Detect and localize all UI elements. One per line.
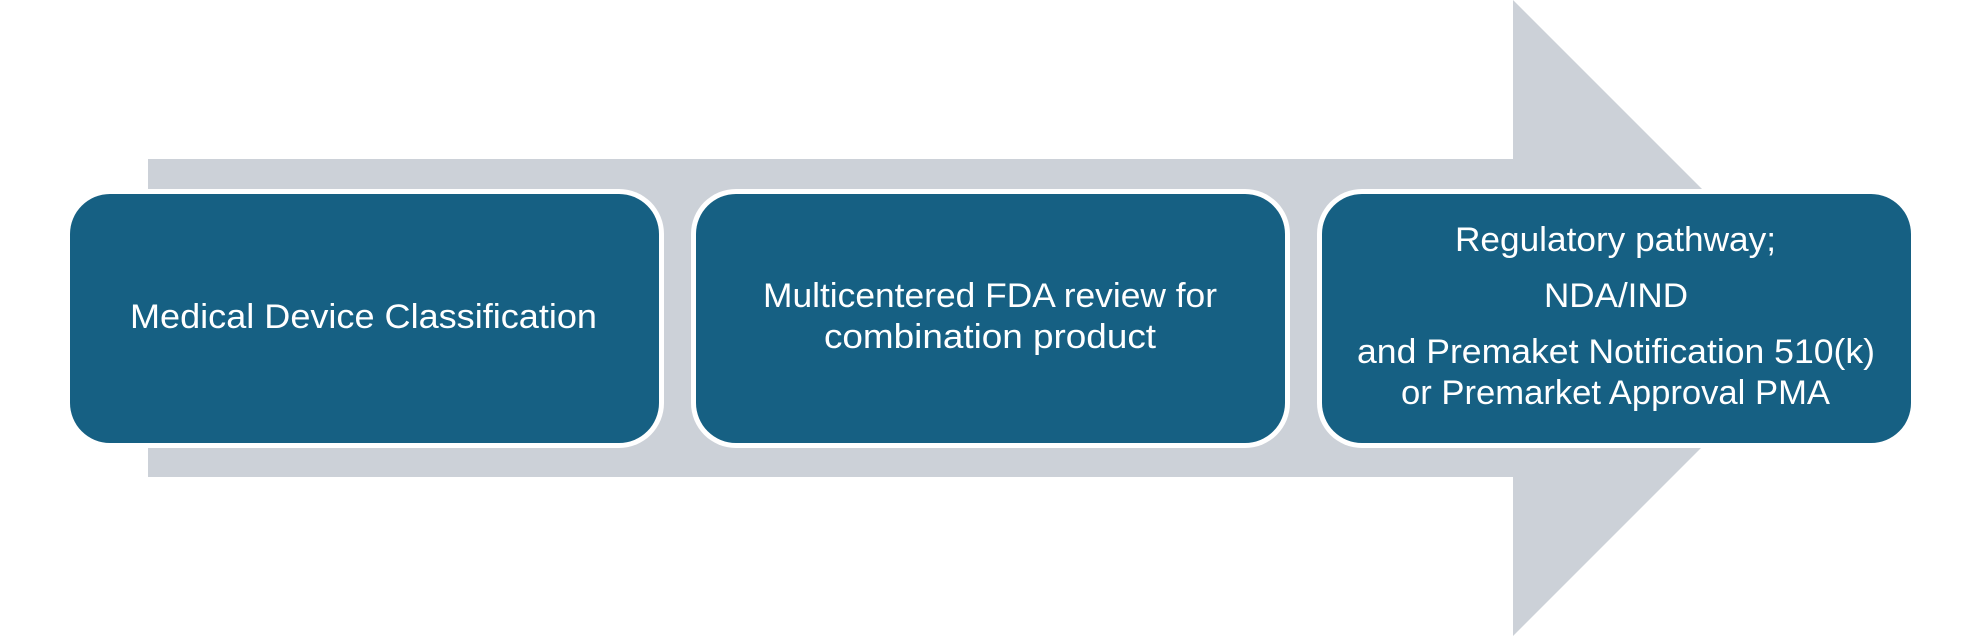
text: step 2 label <box>763 277 1217 356</box>
text: step 3 label: NDA/IND <box>1544 277 1688 315</box>
panel: step 1 medical device classification <box>65 189 664 448</box>
text: step 3 label <box>1357 221 1875 412</box>
panel: step 3 regulatory pathway <box>1317 189 1916 448</box>
text: step 3 label: Regulatory pathway; <box>1455 221 1776 259</box>
text: step 2 label: combination product <box>824 318 1157 356</box>
text: step 3 label: and Premaket Notification 510(k) <box>1357 333 1875 371</box>
panel: step 2 multicentered FDA review <box>691 189 1290 448</box>
text: step 2 label: Multicentered FDA review for <box>763 277 1217 315</box>
text: step 1 label: Medical Device Classification <box>130 298 597 336</box>
text: step 3 label: or Premarket Approval PMA <box>1401 374 1830 412</box>
